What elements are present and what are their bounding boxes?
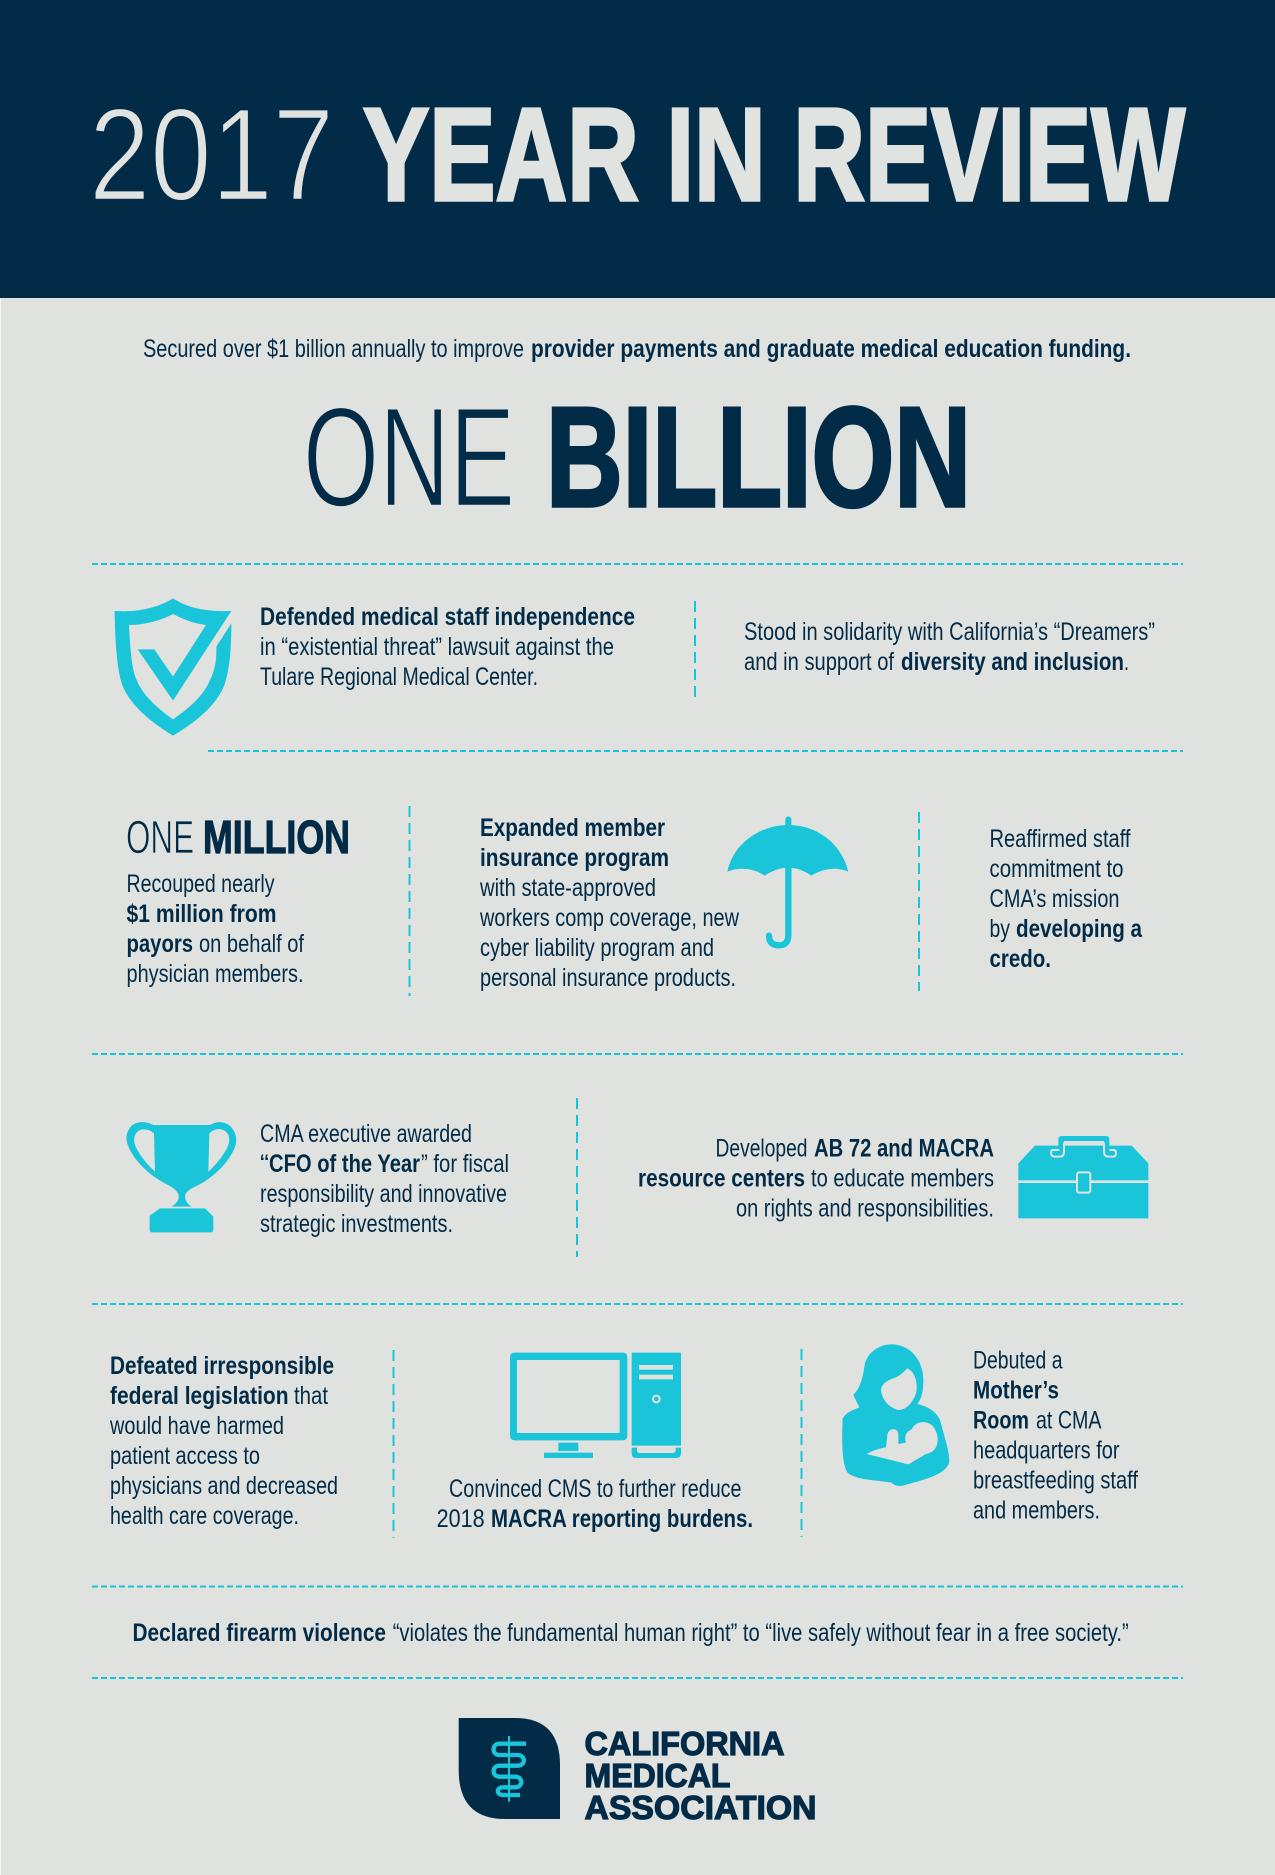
text: reaffirmed credo [990, 825, 1143, 973]
logo mark [459, 1718, 560, 1819]
text: firearm violence declaration: Declared firearm violence [132, 1619, 386, 1647]
icon: toolbox [1018, 1136, 1148, 1218]
text: dreamers solidarity: diversity and inclusion [901, 648, 1124, 676]
text: mother's room: headquarters for [973, 1436, 1120, 1464]
text: resource centers: AB 72 and MACRA [814, 1134, 994, 1162]
text: defeated federal legislation: patient access to [110, 1442, 260, 1470]
text: expanded member insurance: cyber liability program and [480, 934, 714, 962]
intro sentence [143, 335, 1131, 363]
text: cfo of the year: CMA executive awarded [260, 1120, 472, 1148]
logo wordmark: CALIFORNIA [584, 1725, 784, 1762]
text: defended medical staff independence: Tulare Regional Medical Center. [260, 663, 538, 691]
text: dreamers solidarity: and in support of [744, 648, 894, 676]
text: reaffirmed credo: developing a [1016, 915, 1143, 943]
intro sentence: provider payments and graduate medical education funding. [531, 335, 1131, 363]
text: resource centers: Developed [716, 1134, 808, 1162]
text: defended medical staff independence: in “existential threat” lawsuit against the [260, 633, 614, 661]
text: recouped payments: payors [126, 930, 193, 958]
text: dreamers solidarity: . [1124, 648, 1129, 676]
text: dreamers solidarity: Stood in solidarity with California’s “Dreamers” [744, 618, 1155, 646]
text: cfo of the year [260, 1120, 509, 1238]
icon: trophy [126, 1122, 236, 1232]
text: defeated federal legislation: would have harmed [109, 1412, 284, 1440]
text: mother's room [973, 1346, 1138, 1524]
text: expanded member insurance: with state-approved [479, 874, 656, 902]
text: macra reporting burdens: 2018 [437, 1505, 485, 1533]
logo wordmark [584, 1725, 816, 1826]
text: expanded member insurance: Expanded member [480, 814, 665, 842]
intro sentence: Secured over $1 billion annually to improve [143, 335, 524, 363]
text: dreamers solidarity [744, 618, 1155, 676]
text: resource centers [638, 1134, 994, 1222]
text: resource centers: on rights and responsibilities. [736, 1194, 994, 1222]
text: reaffirmed credo: by [990, 915, 1010, 943]
text: defeated federal legislation: health care coverage. [110, 1502, 299, 1530]
text: resource centers: to educate members [811, 1164, 994, 1192]
text: expanded member insurance [479, 814, 740, 992]
text: resource centers: resource centers [638, 1164, 805, 1192]
text: recouped payments: physician members. [126, 960, 304, 988]
text: macra reporting burdens: MACRA reporting burdens. [491, 1505, 753, 1533]
text: expanded member insurance: insurance program [480, 844, 669, 872]
logo wordmark: ASSOCIATION [584, 1789, 816, 1826]
text: mother's room: at CMA [1036, 1406, 1102, 1434]
text: reaffirmed credo: credo. [990, 945, 1051, 973]
text: firearm violence declaration [132, 1619, 1129, 1647]
header band with title: 2017 [89, 81, 334, 228]
text: macra reporting burdens [437, 1475, 753, 1533]
logo: california medical association [459, 1718, 816, 1826]
text: recouped payments: $1 million from [126, 900, 276, 928]
text: mother's room: Mother’s [973, 1376, 1059, 1404]
text: defeated federal legislation: Defeated irresponsible [110, 1352, 334, 1380]
text: reaffirmed credo: CMA’s mission [990, 885, 1120, 913]
text: defeated federal legislation [109, 1352, 338, 1530]
text: defeated federal legislation: physicians and decreased [110, 1472, 338, 1500]
text: defeated federal legislation: that [294, 1382, 328, 1410]
text: defended medical staff independence: Defended medical staff independence [260, 603, 635, 631]
text: cfo of the year: “ [260, 1150, 269, 1178]
text: expanded member insurance: workers comp coverage, new [479, 904, 740, 932]
text: cfo of the year: ” for fiscal [421, 1150, 509, 1178]
text: recouped payments: on behalf of [199, 930, 304, 958]
text: cfo of the year: strategic investments. [260, 1210, 453, 1238]
text: macra reporting burdens: Convinced CMS to further reduce [449, 1475, 742, 1503]
logo wordmark: MEDICAL [584, 1757, 730, 1794]
text: cfo of the year: responsibility and innovative [260, 1180, 507, 1208]
icon: mother and baby [842, 1344, 949, 1486]
text: reaffirmed credo: Reaffirmed staff [990, 825, 1131, 853]
one million block [126, 811, 350, 988]
heading: one million: ONE [126, 811, 194, 863]
icon: desktop computer [510, 1353, 681, 1458]
text: defended medical staff independence [260, 603, 635, 691]
big heading: one billion: ONE [303, 378, 515, 537]
heading: one million: MILLION [203, 811, 350, 863]
text: recouped payments: Recouped nearly [126, 870, 275, 898]
heading: one million [126, 811, 350, 863]
header band with title [0, 0, 1275, 298]
big heading: one billion [303, 378, 971, 537]
text: defeated federal legislation: federal legislation [110, 1382, 289, 1410]
icon: shield with check [115, 598, 231, 736]
text: reaffirmed credo: commitment to [990, 855, 1124, 883]
text: mother's room: breastfeeding staff [973, 1466, 1138, 1494]
text: recouped payments [126, 870, 304, 988]
text: mother's room: and members. [973, 1496, 1100, 1524]
text: cfo of the year: CFO of the Year [269, 1150, 420, 1178]
big heading: one billion: BILLION [546, 378, 971, 537]
text: mother's room: Room [973, 1406, 1029, 1434]
text: expanded member insurance: personal insurance products. [480, 964, 736, 992]
text: mother's room: Debuted a [973, 1346, 1063, 1374]
icon: umbrella [727, 819, 848, 945]
